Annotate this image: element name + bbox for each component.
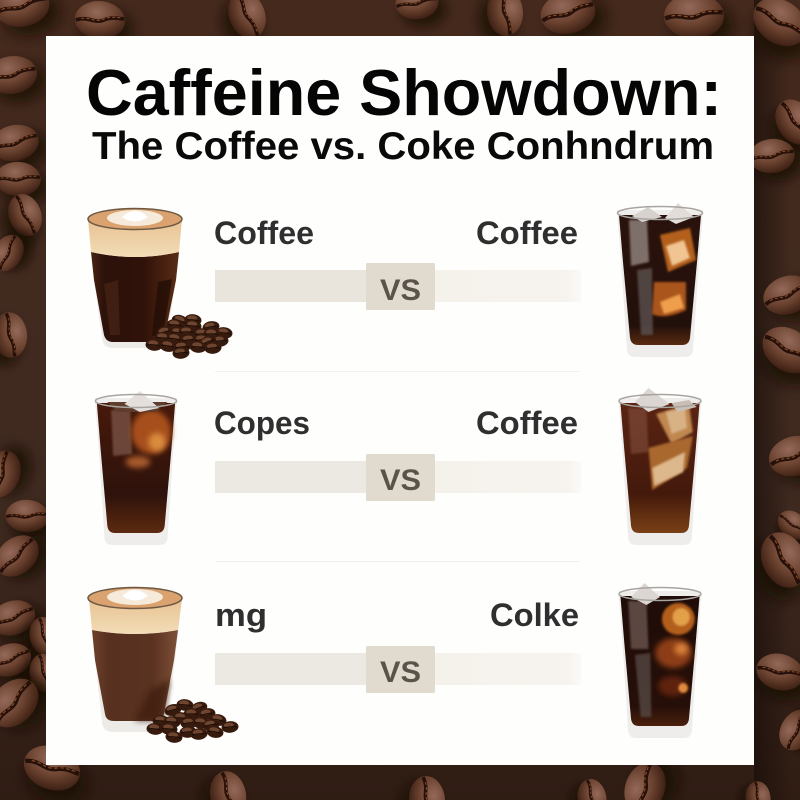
- label: right: Coffee: [476, 215, 578, 251]
- label: left: Copes: [214, 405, 310, 441]
- title: [86, 56, 722, 168]
- label: right: Coffee: [476, 405, 578, 441]
- comparison bar: [215, 454, 581, 501]
- label: right: Colke: [490, 597, 579, 633]
- icon: iced cola glass: [617, 203, 703, 357]
- icon: iced coffee glass: [619, 388, 701, 545]
- icon: latte glass with beans: [88, 208, 233, 360]
- divider: [215, 371, 580, 372]
- label: left: mg: [215, 597, 267, 633]
- icon: iced cola glass: [95, 391, 177, 545]
- comparison bar: [215, 263, 581, 310]
- icon: latte glass with beans: [88, 588, 239, 744]
- icon: iced cola glass: [619, 583, 701, 738]
- divider: [215, 561, 580, 562]
- row 2: [95, 388, 701, 545]
- row 3: [88, 583, 701, 744]
- label: left: Coffee: [214, 215, 314, 251]
- comparison bar: VS: [380, 274, 421, 307]
- subtitle line: The Coffee vs. Coke Conhndrum: [92, 125, 714, 168]
- title line 1: Caffeine Showdown:: [86, 56, 722, 129]
- comparison bar: [215, 646, 581, 693]
- row 1: [88, 203, 703, 360]
- comparison bar: VS: [380, 464, 421, 497]
- comparison bar: VS: [380, 656, 421, 689]
